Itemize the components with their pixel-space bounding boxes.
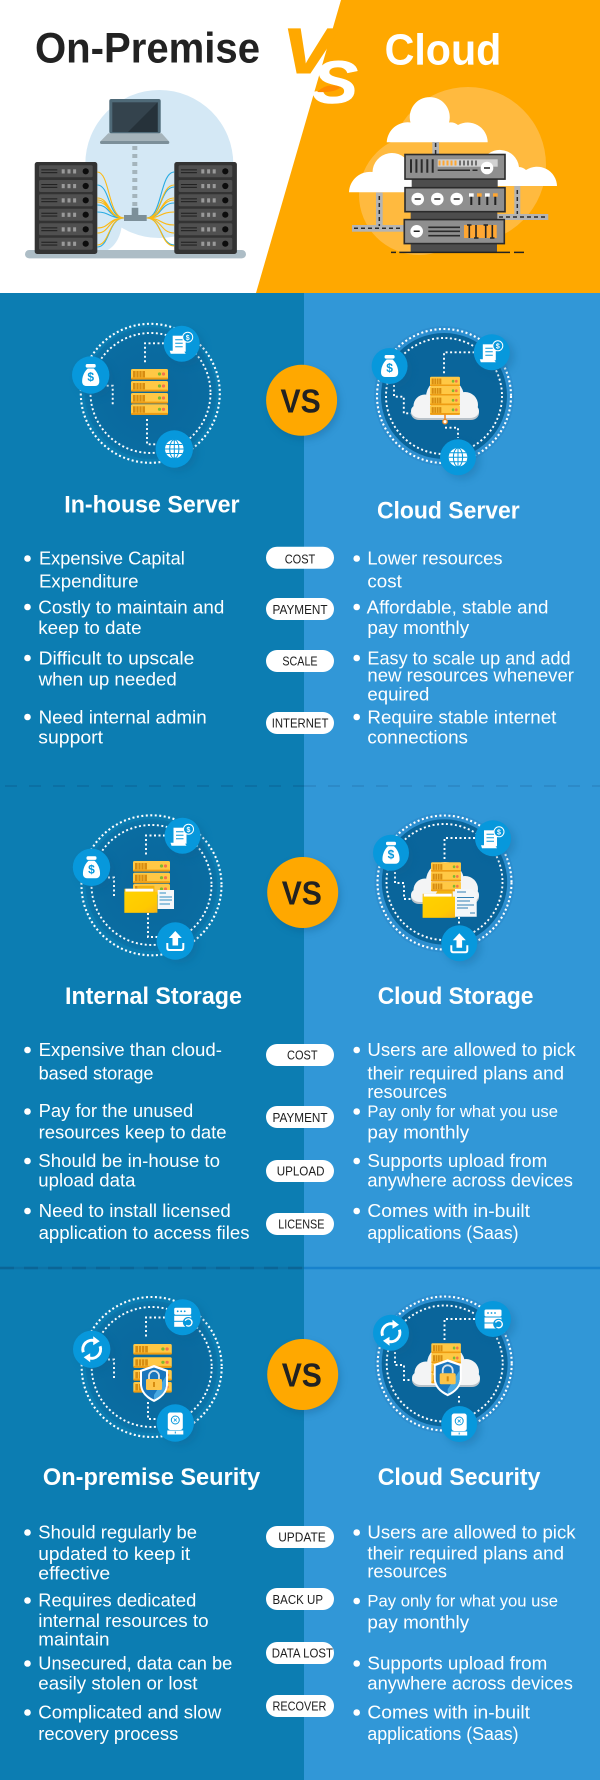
- icon: cloud security diagram: [373, 1294, 515, 1446]
- list: cloud storage points: [353, 1040, 577, 1243]
- list: comparison pills: [266, 547, 334, 734]
- list: in-house server points: keep to date: [38, 618, 142, 638]
- list: comparison pills: LICENSE: [278, 1217, 324, 1231]
- heading: Cloud Server: Cloud Server: [377, 497, 520, 524]
- icon: cloud server diagram: $: [386, 361, 393, 375]
- title: VS lettering: S: [312, 49, 358, 116]
- list: cloud security points: their required plans and: [367, 1543, 564, 1563]
- illustration: on-premise server racks and laptop: [25, 90, 246, 258]
- list: cloud security points: Supports upload from: [367, 1653, 547, 1673]
- list: internal storage points: resources keep to date: [39, 1122, 227, 1142]
- icon: in-house server diagram: [72, 324, 220, 471]
- list: comparison pills: INTERNET: [272, 716, 329, 730]
- list: cloud security points: anywhere across devices: [367, 1673, 573, 1693]
- list: comparison pills: [266, 1044, 334, 1235]
- icon: cloud storage diagram: $: [388, 848, 395, 862]
- panel: on-premise column: [0, 293, 304, 1780]
- list: cloud storage points: Pay only for what you use: [367, 1103, 558, 1121]
- list: on-premise security points: recovery process: [38, 1724, 178, 1744]
- title: On-Premise: On-Premise: [35, 25, 260, 73]
- title: VS lettering: [282, 15, 358, 116]
- list: comparison pills: DATA LOST: [272, 1646, 333, 1660]
- list: on-premise security points: Should regularly be: [38, 1522, 197, 1542]
- list: comparison pills: RECOVER: [272, 1699, 326, 1713]
- list: on-premise security points: easily stolen or lost: [38, 1673, 197, 1693]
- list: cloud storage points: applications (Saas): [367, 1223, 519, 1243]
- list: internal storage points: Expensive than cloud-: [39, 1040, 222, 1060]
- icon: cloud server diagram: [372, 326, 514, 479]
- title: VS lettering: V: [282, 15, 340, 87]
- list: cloud server points: connections: [367, 727, 468, 747]
- panel: security comparison: [24, 1294, 577, 1744]
- list: comparison pills: SCALE: [282, 654, 318, 668]
- list: cloud server points: cost: [367, 571, 402, 591]
- panel: cloud column: [304, 293, 600, 1780]
- list: comparison pills: UPDATE: [278, 1530, 326, 1544]
- list: cloud storage points: pay monthly: [367, 1122, 469, 1142]
- list: cloud security points: Comes with in-built: [367, 1702, 530, 1722]
- list: comparison pills: UPLOAD: [277, 1164, 324, 1178]
- list: internal storage points: upload data: [38, 1171, 137, 1191]
- badge: VS: [267, 857, 340, 931]
- list: comparison pills: PAYMENT: [272, 603, 328, 617]
- badge: VS: VS: [280, 382, 321, 420]
- list: cloud server points: equired: [367, 684, 429, 704]
- icon: cloud server diagram: $: [496, 344, 500, 350]
- list: internal storage points: [24, 1040, 250, 1243]
- list: cloud security points: Users are allowed to pick: [367, 1522, 577, 1542]
- heading: Cloud Storage: Cloud Storage: [378, 983, 534, 1010]
- list: in-house server points: when up needed: [38, 669, 177, 689]
- list: comparison pills: COST: [285, 552, 316, 566]
- list: internal storage points: Need to install licensed: [39, 1201, 231, 1221]
- list: cloud server points: Require stable internet: [367, 707, 556, 727]
- list: on-premise security points: maintain: [38, 1629, 109, 1649]
- list: cloud storage points: their required plans and: [367, 1063, 564, 1083]
- list: in-house server points: Difficult to upscale: [39, 648, 194, 668]
- list: cloud storage points: resources: [367, 1082, 447, 1102]
- list: on-premise security points: internal resources to: [38, 1611, 209, 1631]
- list: in-house server points: Need internal admin: [39, 707, 207, 727]
- list: on-premise security points: updated to keep it: [38, 1544, 190, 1564]
- list: on-premise security points: Requires dedicated: [38, 1590, 196, 1610]
- list: cloud security points: pay monthly: [367, 1612, 469, 1632]
- icon: in-house server diagram: $: [186, 335, 190, 342]
- panel: server comparison: [24, 324, 574, 747]
- list: comparison pills: BACK UP: [272, 1593, 323, 1607]
- title: Cloud: Cloud: [385, 25, 501, 74]
- list: in-house server points: Expenditure: [39, 571, 138, 591]
- list: cloud server points: Affordable, stable and: [367, 597, 548, 617]
- icon: internal storage diagram: $: [187, 827, 191, 834]
- list: cloud server points: new resources whenever: [367, 666, 574, 686]
- heading: In-house Server: In-house Server: [64, 491, 240, 518]
- list: cloud storage points: Users are allowed to pick: [367, 1040, 577, 1060]
- panel: storage comparison: [24, 812, 577, 1243]
- list: on-premise security points: effective: [38, 1564, 110, 1584]
- list: internal storage points: Should be in-house to: [38, 1151, 220, 1171]
- list: in-house server points: [24, 549, 224, 747]
- list: in-house server points: Costly to maintain and: [38, 597, 224, 617]
- list: cloud server points: Easy to scale up and add: [367, 648, 571, 668]
- list: cloud server points: pay monthly: [367, 618, 469, 638]
- list: cloud security points: applications (Saas): [367, 1724, 519, 1744]
- heading: On-premise Seurity: On-premise Seurity: [43, 1464, 261, 1491]
- badge: VS: [267, 1339, 340, 1413]
- divider: second section break: [0, 1267, 600, 1269]
- list: internal storage points: based storage: [39, 1063, 154, 1083]
- list: cloud storage points: Supports upload from: [367, 1151, 547, 1171]
- list: on-premise security points: Complicated and slow: [38, 1702, 222, 1722]
- list: cloud security points: [353, 1522, 577, 1744]
- icon: cloud storage diagram: $: [497, 830, 501, 836]
- heading: Cloud Security: Cloud Security: [378, 1464, 541, 1491]
- list: in-house server points: Expensive Capital: [39, 549, 185, 569]
- icon: in-house server diagram: $: [87, 370, 94, 384]
- list: cloud security points: resources: [367, 1562, 447, 1582]
- list: comparison pills: COST: [287, 1048, 318, 1062]
- list: cloud server points: Lower resources: [367, 549, 502, 569]
- list: on-premise security points: [24, 1522, 232, 1744]
- list: cloud server points: [353, 549, 574, 747]
- divider: first section break: [5, 785, 600, 787]
- panel: header background: [0, 0, 600, 293]
- list: cloud storage points: Comes with in-built: [367, 1201, 530, 1221]
- icon: cloud storage diagram: [373, 812, 515, 965]
- list: cloud security points: Pay only for what you use: [367, 1593, 558, 1611]
- list: in-house server points: support: [38, 727, 103, 747]
- list: cloud storage points: anywhere across devices: [367, 1171, 573, 1191]
- badge: VS: VS: [282, 1357, 322, 1394]
- icon: internal storage diagram: $: [88, 862, 95, 876]
- list: comparison pills: [266, 1526, 334, 1717]
- badge: VS: VS: [282, 875, 322, 912]
- list: internal storage points: Pay for the unused: [39, 1101, 193, 1121]
- heading: Internal Storage: Internal Storage: [65, 983, 242, 1010]
- list: internal storage points: application to access files: [39, 1223, 249, 1243]
- icon: internal storage diagram: [73, 815, 222, 963]
- illustration: cloud server stack: [349, 87, 557, 255]
- list: on-premise security points: Unsecured, data can be: [38, 1653, 232, 1673]
- badge: VS: [266, 365, 339, 439]
- icon: on-premise security diagram: [73, 1297, 222, 1445]
- list: comparison pills: PAYMENT: [272, 1111, 328, 1125]
